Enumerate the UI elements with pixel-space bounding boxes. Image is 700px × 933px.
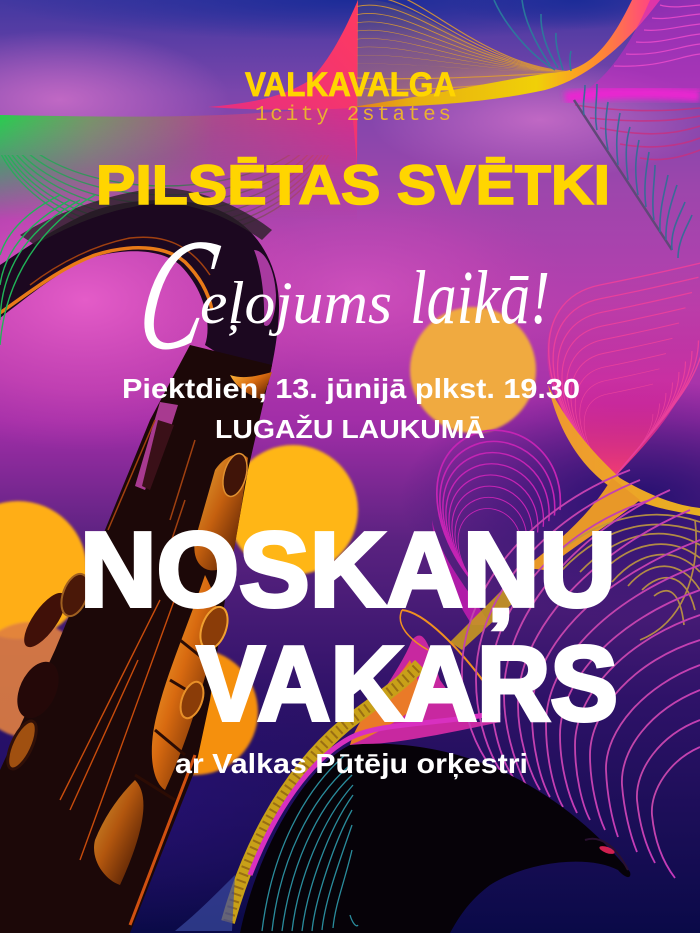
black shape (240, 744, 630, 933)
teal tick lines upper (494, 0, 571, 71)
saxophone: upper gold keys (194, 454, 248, 570)
script title: laikā! (410, 256, 550, 340)
saxophone: gold rungs (135, 640, 205, 800)
top wave: red ribbon (208, 0, 358, 165)
subtitle: ar Valkas Pūtēju orķestri (175, 748, 528, 779)
saxophone: top flange highlights (230, 372, 272, 400)
green and pink light band (0, 104, 357, 220)
thin band to lower left (175, 875, 235, 931)
central ribbon (350, 582, 525, 745)
magenta tip accent (585, 839, 628, 870)
green arcs over neck (0, 195, 95, 345)
saxophone (0, 188, 279, 933)
orange wave (525, 385, 700, 570)
saxophone: right gold keys (152, 575, 218, 790)
teal lines on black shape (262, 755, 358, 931)
saxophone: pink window (135, 402, 178, 490)
date and time: Piektdien, 13. jūnijā plkst. 19.30 (122, 373, 580, 404)
script title: C (124, 206, 230, 383)
script title (124, 206, 550, 383)
venue: LUGAŽU LAUKUMĀ (215, 414, 485, 444)
saxophone: neck gold highlight (0, 248, 212, 313)
saxophone: bell key 2 (9, 655, 67, 725)
saxophone: neck inner highlight (30, 237, 210, 285)
saxophone: dark lower stripes upper (108, 420, 195, 560)
saxophone: bell key 4 (56, 570, 94, 620)
yellow and magenta edge band (228, 665, 500, 922)
script title: eļojums (200, 270, 392, 336)
saxophone: key 1 (195, 603, 233, 653)
saxophone: ring (219, 451, 251, 499)
saxophone: rods (60, 590, 195, 925)
heading: PILSĒTAS SVĒTKI (96, 153, 610, 216)
big pink wave (547, 262, 700, 480)
teal tick lines right (574, 84, 692, 258)
logo (245, 66, 456, 127)
main title line 2: VAKARS (197, 625, 618, 743)
saxophone: bell key 1 (17, 587, 73, 653)
saxophone: key 2 (176, 679, 208, 721)
saxophone: neck (0, 200, 279, 385)
yellow concentric wave (545, 515, 700, 640)
saxophone: bell key 3 (2, 717, 42, 773)
saxophone: opening (254, 250, 276, 326)
logo tagline: 1city 2states (255, 104, 451, 127)
bokeh lights (0, 307, 536, 775)
saxophone: octave key guard (20, 188, 272, 245)
magenta fan lines (462, 470, 700, 878)
concentric arcs behind neck (0, 155, 329, 226)
saxophone: body (0, 345, 272, 933)
middle magenta wave (432, 430, 560, 625)
top wave: yellow ribbon (352, 0, 660, 107)
saxophone: lower gold (94, 780, 143, 885)
saxophone: window bar (142, 420, 174, 490)
top right wave: magenta lines (565, 0, 700, 160)
logo wordmark: VALKAVALGA (245, 66, 456, 104)
main title line 1: NOSKAŅU (80, 511, 616, 630)
